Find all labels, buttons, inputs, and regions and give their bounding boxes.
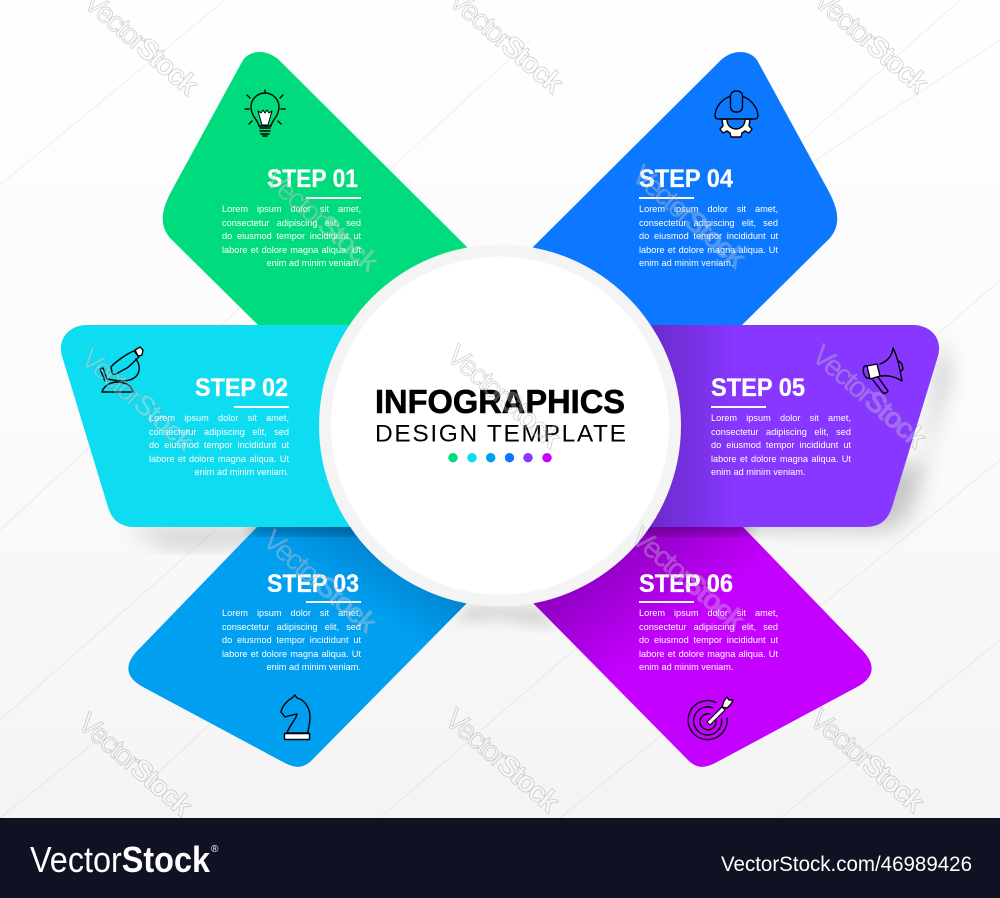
body text: enim ad minim veniam. [267,662,361,672]
icon: helmet and gear [715,91,758,137]
step title: STEP 03 [267,570,359,598]
body text: do eiusmod tempor incididunt ut [711,440,851,450]
body text: Lorem ipsum dolor sit amet, [711,413,851,423]
body text: consectetur adipiscing elit, sed [222,218,361,228]
panel: step 01 [163,52,500,426]
body text: do eiusmod tempor incididunt ut [149,440,289,450]
body text: consectetur adipiscing elit, sed [149,426,289,436]
body text: Lorem ipsum dolor sit amet, [639,204,778,214]
icon: microscope [100,347,143,392]
petal shape [128,426,500,767]
panel: step 03 [128,426,500,767]
step title: STEP 01 [267,165,358,193]
panel: step 04 [500,52,837,426]
petal shape [61,325,420,527]
body text: enim ad minim veniam. [639,662,733,672]
body text: enim ad minim veniam. [195,467,289,477]
watermarks: VectorStock [74,342,202,459]
icon: megaphone [862,348,903,393]
body text: enim ad minim veniam. [267,258,361,268]
panel: step 06 [500,426,872,767]
body text: labore et dolore magna aliqua. Ut [711,454,851,464]
footer logo: VectorStock [30,839,211,880]
body text: labore et dolore magna aliqua. Ut [149,454,289,464]
petal shape [500,52,837,426]
body text: Lorem ipsum dolor sit amet, [639,608,778,618]
body text [222,203,361,273]
watermarks: VectorStock [625,159,753,276]
body text [639,203,778,273]
panel: step 02 [61,325,420,527]
body text: do eiusmod tempor incididunt ut [639,231,778,241]
watermarks: VectorStock [71,707,199,824]
body text: labore et dolore magna aliqua. Ut [222,648,361,658]
footer url: VectorStock.com/46989426 [721,853,972,876]
petal shape [580,325,939,527]
body text: enim ad minim veniam. [639,258,733,268]
step title: STEP 04 [639,165,733,193]
center title: INFOGRAPHICS [375,383,625,420]
body text: do eiusmod tempor incididunt ut [222,635,361,645]
watermarks: VectorStock [805,339,933,456]
body text: labore et dolore magna aliqua. Ut [639,244,778,254]
body text: do eiusmod tempor incididunt ut [222,231,361,241]
panel: step 05 [580,325,939,527]
body text: consectetur adipiscing elit, sed [639,622,778,632]
watermarks: VectorStock [258,163,386,280]
body text: labore et dolore magna aliqua. Ut [639,648,778,658]
central circle [319,244,681,606]
body text: enim ad minim veniam. [711,467,805,477]
body text: do eiusmod tempor incididunt ut [639,635,778,645]
registered mark: ® [211,844,219,855]
body text: labore et dolore magna aliqua. Ut [222,244,361,254]
body text [222,607,361,677]
icon: light bulb [245,90,285,136]
watermarks: VectorStock [803,703,931,820]
panel shadows on lower petals [250,520,750,534]
body text [149,412,289,482]
footer bar [0,818,1000,898]
body text: consectetur adipiscing elit, sed [711,426,851,436]
shadow: side panel and circle [125,335,950,628]
body text: Lorem ipsum dolor sit amet, [222,608,361,618]
body text [711,412,851,482]
watermarks: VectorStock [438,703,566,820]
watermarks: VectorStock [624,521,752,638]
step title: STEP 02 [195,374,288,402]
body text [639,607,778,677]
body text: Lorem ipsum dolor sit amet, [149,413,289,423]
step title: STEP 06 [639,570,733,598]
watermarks [71,0,935,824]
petal shape [163,52,500,426]
icon: target with dart [688,697,733,740]
watermarks: VectorStock [440,339,568,456]
petal shape [500,426,872,767]
body text: Lorem ipsum dolor sit amet, [222,204,361,214]
center subtitle: DESIGN TEMPLATE [375,420,626,448]
body text: consectetur adipiscing elit, sed [222,622,361,632]
watermarks: VectorStock [256,524,384,641]
body text: consectetur adipiscing elit, sed [639,218,778,228]
icon: chess knight [281,695,310,740]
colour dots [448,453,552,462]
step title: STEP 05 [711,374,805,402]
